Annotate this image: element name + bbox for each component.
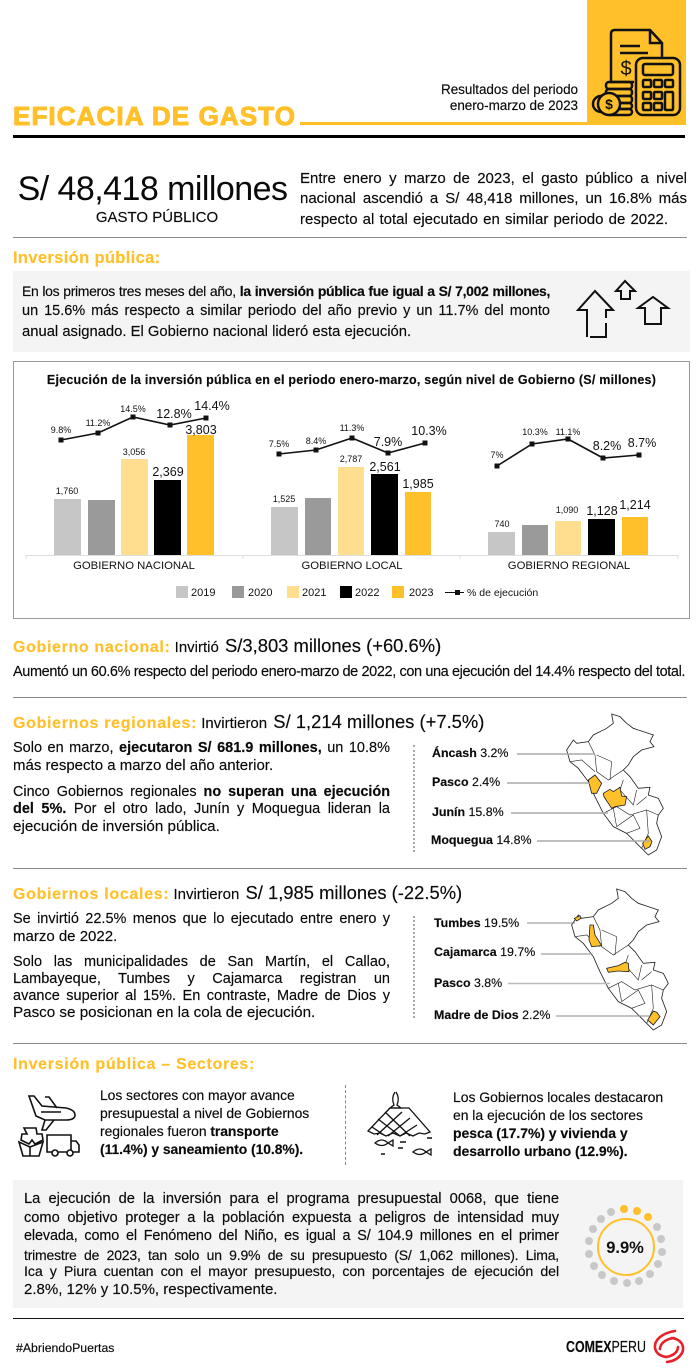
header rule <box>13 135 685 138</box>
gobiernos regionales text <box>13 740 390 835</box>
category labels: GOBIERNO LOCAL <box>301 560 403 572</box>
icon: budget document, calculator and coins <box>592 28 682 116</box>
title: EFICACIA DE GASTO <box>13 101 296 131</box>
program text: La ejecución de la inversión para el programa presupuestal 0068, que tiene <box>24 1191 559 1207</box>
data labels: 11.3% <box>340 423 364 433</box>
bar and line chart: 12.8% <box>156 407 192 421</box>
gobierno nacional text: Aumentó un 60.6% respecto del periodo enero-marzo de 2022, con una ejecución del 14.4% respecto del total. <box>13 664 685 680</box>
group: gobierno regional bars <box>488 517 648 555</box>
title underline <box>300 122 686 125</box>
data labels: 8.4% <box>306 436 326 446</box>
fishing text <box>453 1089 663 1160</box>
headline figure <box>18 170 287 226</box>
program text: como objetivo proteger a la población expuesta a peligros de intensidad muy <box>24 1210 559 1226</box>
data labels: 1,525 <box>273 494 295 504</box>
legend: 2023 <box>409 587 433 599</box>
legend: 2022 <box>355 587 379 599</box>
period text: Resultados del periodo <box>441 82 578 97</box>
fishing text: Los Gobiernos locales destacaron <box>453 1089 663 1105</box>
bar and line chart: 3,803 <box>185 423 217 437</box>
section heading: inversión pública: Inversión pública: <box>13 249 160 267</box>
logo mark <box>654 1330 684 1364</box>
bar and line chart: 2,561 <box>369 460 401 474</box>
data labels: 1,760 <box>56 486 78 496</box>
bar and line chart: 1,985 <box>402 477 434 491</box>
data labels: 1,090 <box>556 505 578 515</box>
bar and line chart: 7.9% <box>374 435 402 449</box>
bar and line chart: 2,369 <box>152 465 184 479</box>
gobiernos locales text: Pasco se posicionan en la cola de ejecución. <box>13 1004 315 1021</box>
map label: Madre de Dios: Madre de Dios 2.2% <box>434 1008 550 1022</box>
bar and line chart: 8.7% <box>628 436 656 450</box>
panel: programa presupuestal 0068 <box>13 1180 683 1308</box>
logo wordmark: COMEXPERU <box>566 1339 646 1356</box>
footer rule <box>13 1318 684 1319</box>
hashtag: #AbriendoPuertas <box>16 1341 114 1355</box>
transport text <box>100 1087 309 1158</box>
data labels: 7% <box>490 450 504 460</box>
transport text: Los sectores con mayor avance <box>100 1087 295 1103</box>
gobiernos regionales text: del 5%. Por el otro lado, Junín y Moquegua lideran la <box>13 801 390 817</box>
summary text: anual asignado. El Gobierno nacional lideró esta ejecución. <box>22 324 411 340</box>
donut: 9.9% execution: 9.9% <box>606 1239 644 1257</box>
legend: 2019 <box>191 587 215 599</box>
sector divider <box>345 1085 346 1165</box>
data labels <box>51 404 580 529</box>
data labels: 10.3% <box>522 427 548 437</box>
group: gobierno nacional bars <box>54 435 214 555</box>
bar and line chart: 1,214 <box>619 498 651 512</box>
map label: Tumbes: Tumbes 19.5% <box>434 916 519 930</box>
bar and line chart: 14.4% <box>194 399 230 413</box>
panel: inversión pública summary <box>13 271 690 352</box>
fishing text: desarrollo urbano (12.9%). <box>453 1143 628 1159</box>
legend <box>176 586 538 599</box>
map label: Pasco: Pasco 2.4% <box>432 775 500 789</box>
gobiernos regionales text: Cinco Gobiernos regionales no superan una ejecución <box>13 784 390 800</box>
category labels <box>73 560 630 572</box>
section heading: sectores: Inversión pública – Sectores: <box>13 1056 255 1073</box>
data labels: 11.2% <box>86 418 110 428</box>
regional divider <box>413 745 415 852</box>
bar and line chart: 8.2% <box>593 439 621 453</box>
execution lines <box>61 417 639 466</box>
gobiernos locales text: Lambayeque, Tumbes y Cajamarca registran un <box>13 971 390 987</box>
leader lines <box>507 754 650 841</box>
section: gobiernos locales: Gobiernos locales: Invirtieron S/ 1,985 millones (-22.5%) <box>13 882 462 903</box>
program text: 2.8%, 12% y 10.5%, respectivamente. <box>24 1281 277 1298</box>
legend: % de ejecución <box>467 587 538 599</box>
map label: Junín: Junín 15.8% <box>432 805 504 819</box>
section: gobiernos regionales: Gobiernos regionales: Invirtieron S/ 1,214 millones (+7.5%) <box>13 711 484 732</box>
data labels: 7.5% <box>269 439 289 449</box>
data labels: 740 <box>494 519 510 529</box>
data labels: 11.1% <box>556 427 580 437</box>
summary text: un 15.6% más respecto a similar periodo del año previo y un 11.7% del monto <box>22 303 550 319</box>
transport text: regionales fueron transporte <box>100 1123 279 1139</box>
legend: 2021 <box>302 587 326 599</box>
period text <box>441 82 578 113</box>
data labels: 14.5% <box>120 404 146 414</box>
data labels: 9.8% <box>51 425 71 435</box>
transport text: (11.4%) y saneamiento (10.8%). <box>100 1141 303 1157</box>
axis <box>26 555 678 559</box>
bar and line chart: 10.3% <box>411 424 447 438</box>
total amount: S/ 48,418 millones <box>18 170 287 208</box>
program text: Ica y Piura cuentan con el mayor presupuesto, con porcentajes de ejecución del <box>24 1264 559 1280</box>
category labels: GOBIERNO NACIONAL <box>73 560 195 572</box>
fishing text: en la ejecución de los sectores <box>453 1107 643 1123</box>
label: GASTO PÚBLICO <box>96 209 218 226</box>
gobiernos locales text: avance superior al 15%. En contraste, Madre de Dios y <box>13 988 390 1004</box>
local divider <box>413 916 415 1018</box>
summary text: En los primeros tres meses del año, la inversión pública fue igual a S/ 7,002 millones, <box>22 283 550 299</box>
logo: ComexPerú <box>566 1330 684 1364</box>
data labels: 3,056 <box>123 447 145 457</box>
headline paragraph <box>300 170 687 228</box>
icon: budget document, calculator and coins: $ <box>605 96 613 112</box>
leader lines <box>508 923 650 1016</box>
map label: Moquegua: Moquegua 14.8% <box>431 833 532 847</box>
legend: 2020 <box>248 587 272 599</box>
program text: elevada, como el Fenómeno del Niño, es igual a S/ 104.9 millones en el primer <box>24 1228 559 1244</box>
group: gobierno local bars <box>271 467 431 555</box>
fishing text: pesca (17.7%) y vivienda y <box>453 1125 628 1141</box>
period text: enero-marzo de 2023 <box>450 98 578 113</box>
gobiernos locales text: Solo las municipalidades de San Martín, el Callao, <box>13 954 390 970</box>
gobiernos regionales text: ejecución de inversión pública. <box>13 818 220 835</box>
map label: Cajamarca: Cajamarca 19.7% <box>434 945 535 959</box>
program text: trimestre de 2023, tan solo un 9.9% de su presupuesto (S/ 1,062 millones). Lima, <box>24 1247 559 1263</box>
transport text: presupuestal a nivel de Gobiernos <box>100 1105 309 1121</box>
chart title: Ejecución de la inversión pública en el periodo enero-marzo, según nivel de Gobierno (S/ millones) <box>47 373 656 387</box>
section: gobierno nacional: Gobierno nacional: Invirtió S/3,803 millones (+60.6%) <box>13 635 441 656</box>
map label: Áncash: Áncash 3.2% <box>432 746 508 760</box>
data labels: 2,787 <box>340 454 362 464</box>
gobiernos locales text: Se invirtió 22.5% menos que lo ejecutado entre enero y <box>13 911 390 927</box>
bar and line chart: 1,128 <box>586 504 618 518</box>
headline paragraph: nacional ascendió a S/ 48,418 millones, un 16.8% más <box>300 190 687 207</box>
gobiernos regionales text: más respecto a marzo del año anterior. <box>13 757 273 774</box>
category labels: GOBIERNO REGIONAL <box>508 560 630 572</box>
header orange panel with icon <box>587 0 686 125</box>
headline paragraph: respecto al total ejecutado en similar periodo de 2022. <box>300 211 668 228</box>
panel: investment execution chart <box>13 361 690 619</box>
line markers <box>58 414 642 468</box>
headline paragraph: Entre enero y marzo de 2023, el gasto público a nivel <box>300 170 687 187</box>
summary text <box>22 283 550 340</box>
gobiernos regionales text: Solo en marzo, ejecutaron S/ 681.9 millones, un 10.8% <box>13 740 390 756</box>
program text <box>24 1191 559 1298</box>
map label: Pasco: Pasco 3.8% <box>434 976 502 990</box>
gobiernos locales text <box>13 911 390 1021</box>
gobiernos locales text: marzo de 2022. <box>13 928 117 945</box>
icon: budget document, calculator and coins: $ <box>620 58 632 80</box>
